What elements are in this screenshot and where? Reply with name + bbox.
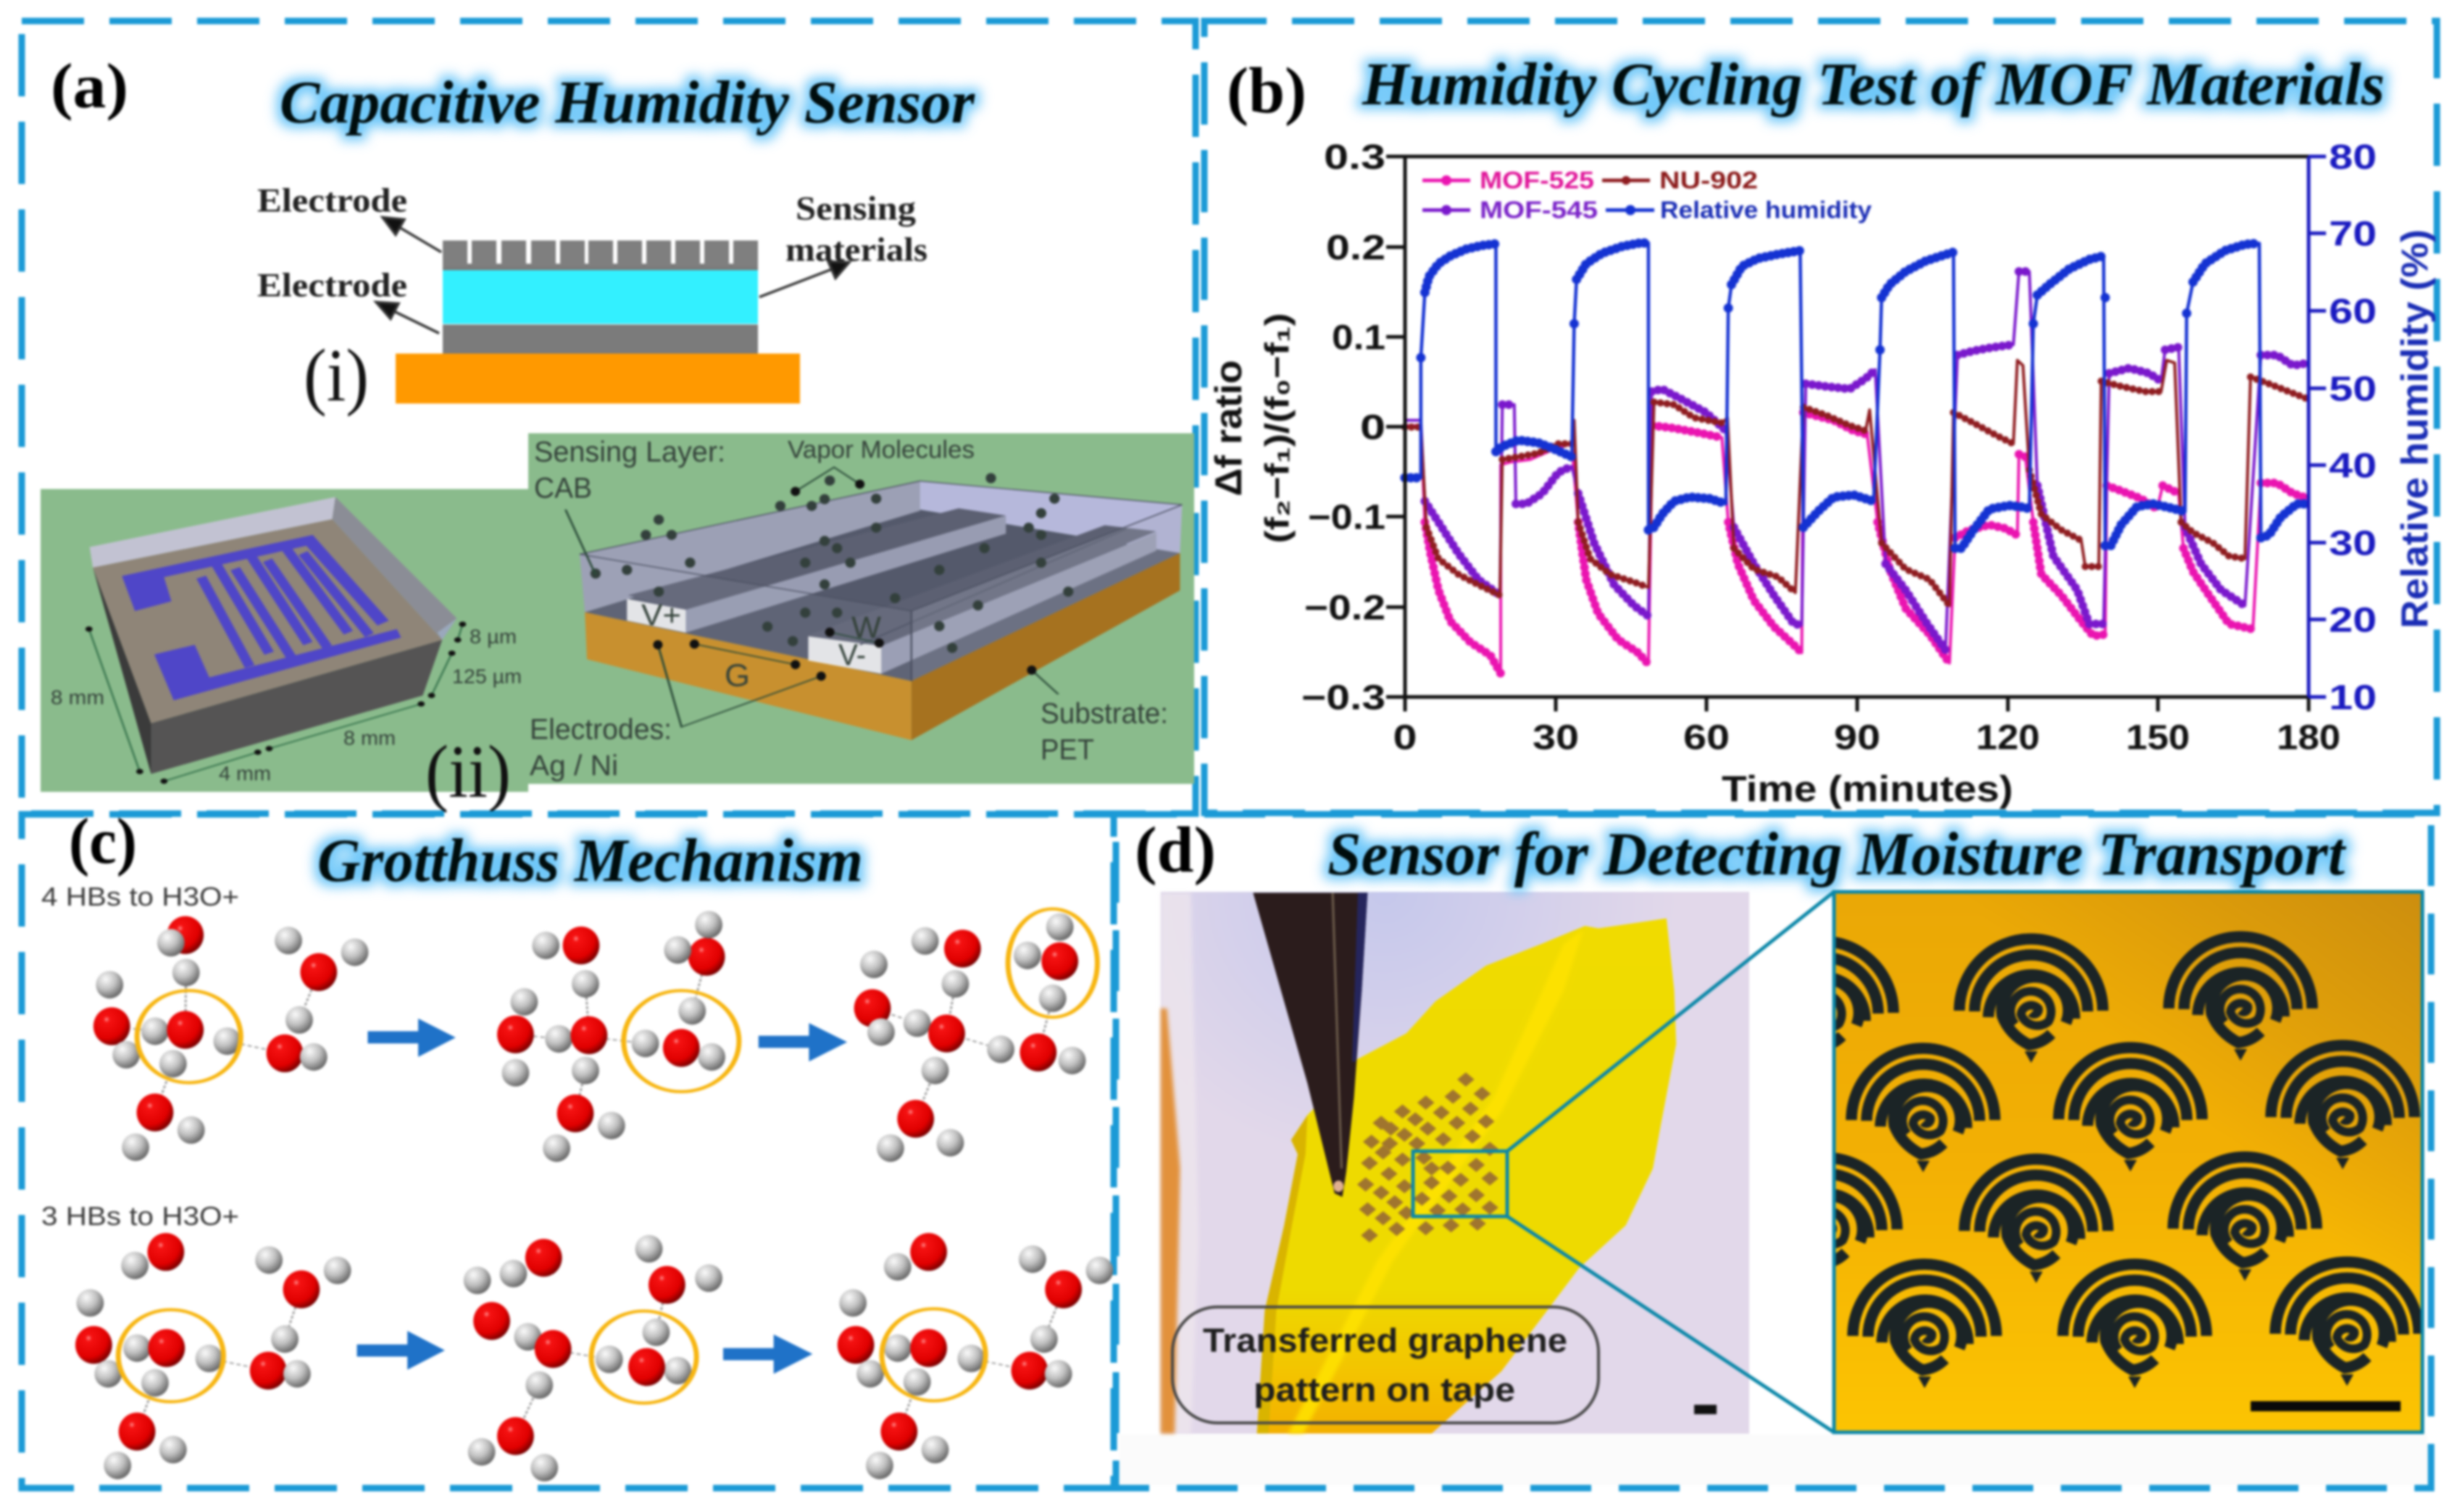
left axis title: (f₂−f₁)/(f₀−f₁) xyxy=(1258,313,1296,543)
diagram ii: sensing layer cross view xyxy=(530,436,1182,782)
legend: NU-902 xyxy=(1659,167,1758,193)
left axis tick labels: −0.2 xyxy=(1304,589,1385,627)
right axis title: Relative humidity (%) xyxy=(2394,229,2436,629)
row 1 cluster 2 xyxy=(497,911,739,1162)
x axis tick labels: 120 xyxy=(1976,719,2040,757)
diagram ii: interdigitated electrode chip xyxy=(51,497,522,785)
panel b: humidity cycling test xyxy=(1204,21,2437,813)
right axis tick labels: 70 xyxy=(2329,215,2377,254)
right axis tick labels: 50 xyxy=(2329,370,2377,409)
left axis tick labels xyxy=(1301,138,1385,717)
diagram ii: interdigitated electrode chip: 8 mm xyxy=(343,727,396,749)
row 1 cluster 3 xyxy=(854,909,1097,1162)
inset: spiral graphene sensors xyxy=(1830,888,2426,1436)
diagram i: layered sensor stack: materials xyxy=(785,231,928,269)
left axis title xyxy=(1208,313,1296,543)
diagram ii: sensing layer cross view: V- xyxy=(838,638,866,672)
scale bar: photo xyxy=(1694,1405,1717,1414)
row 2 cluster 2 xyxy=(464,1235,722,1482)
row 1 cluster 1 xyxy=(93,916,368,1161)
photo: graphene pattern on tape xyxy=(1161,892,1749,1434)
diagram ii: sensing layer cross view: PET xyxy=(1041,734,1094,766)
panel label a: (a) xyxy=(51,51,128,122)
molecule clusters xyxy=(75,909,1113,1482)
label: 3 HBs: 3 HBs to H3O+ xyxy=(41,1201,239,1231)
diagram i: layered sensor stack xyxy=(257,182,928,417)
series: MOF-545 xyxy=(1405,272,2309,650)
title: capacitive humidity sensor: Capacitive Humidity Sensor xyxy=(280,69,975,136)
left axis title: Δf ratio xyxy=(1208,360,1250,496)
right axis tick labels xyxy=(2329,138,2377,717)
scale bar: inset xyxy=(2251,1401,2401,1411)
left axis tick labels: 0 xyxy=(1360,409,1385,447)
callout: transferred graphene pattern xyxy=(1172,1307,1599,1423)
right axis tick labels: 20 xyxy=(2329,601,2377,640)
diagram ii: sensing layer cross view: Electrodes: xyxy=(530,714,672,745)
diagram ii: sensing layer cross view: G xyxy=(725,658,750,693)
diagram ii: interdigitated electrode chip: 8 mm xyxy=(51,686,104,709)
left axis tick labels: 0.3 xyxy=(1324,138,1385,177)
row 2 cluster 3 xyxy=(838,1233,1113,1479)
diagram i: layered sensor stack: (i) xyxy=(304,334,369,417)
row 2 cluster 1 xyxy=(75,1233,351,1479)
sub-panel label ii: (ii) xyxy=(425,730,511,814)
left axis tick labels: −0.1 xyxy=(1308,498,1385,537)
x axis tick labels: 0 xyxy=(1393,719,1417,757)
title: sensor for detecting moisture transport: Sensor for Detecting Moisture Transport xyxy=(1327,820,2346,888)
panel a: capacitive humidity sensor xyxy=(22,21,1196,814)
x axis title: Time (minutes) xyxy=(1722,769,2013,809)
title: humidity cycling test: Humidity Cycling Test of MOF Materials xyxy=(1362,51,2385,118)
diagram ii: interdigitated electrode chip: 125 µm xyxy=(452,665,522,688)
diagram ii: interdigitated electrode chip: 4 mm xyxy=(219,762,271,785)
x axis tick labels xyxy=(1393,719,2341,757)
x axis tick labels: 150 xyxy=(2126,719,2190,757)
right axis tick labels: 30 xyxy=(2329,525,2377,563)
callout: transferred graphene pattern: pattern on tape xyxy=(1254,1371,1515,1408)
right axis tick labels: 80 xyxy=(2329,138,2377,177)
panel label b: (b) xyxy=(1227,55,1306,127)
chart: frequency ratio and relative humidity over time xyxy=(1208,138,2436,809)
series: relative humidity xyxy=(1405,243,2309,548)
chart axes xyxy=(1386,156,2326,711)
x axis tick labels: 30 xyxy=(1533,719,1579,757)
legend: Relative humidity xyxy=(1660,196,1872,223)
x axis tick labels: 60 xyxy=(1683,719,1730,757)
legend: MOF-545 xyxy=(1480,196,1598,223)
diagram i: layered sensor stack: Sensing xyxy=(796,190,917,227)
callout: transferred graphene pattern: Transferred graphene xyxy=(1203,1321,1567,1359)
diagram ii: sensing layer cross view: Sensing Layer: xyxy=(534,436,725,468)
title: Grotthuss mechanism: Grotthuss Mechanism xyxy=(317,827,863,895)
left axis tick labels: 0.2 xyxy=(1326,229,1385,267)
diagram ii: green backgrounds xyxy=(41,433,1194,792)
diagram ii: interdigitated electrode chip: 8 µm xyxy=(470,625,517,648)
right axis tick labels: 40 xyxy=(2329,447,2377,485)
label: 4 HBs: 4 HBs to H3O+ xyxy=(41,882,239,911)
panel label d: (d) xyxy=(1135,814,1216,886)
diagram i: layered sensor stack: Electrode xyxy=(257,182,407,220)
panel c: Grotthuss mechanism xyxy=(22,806,1114,1488)
legend xyxy=(1422,167,1872,223)
arrows between clusters xyxy=(357,1019,847,1374)
x axis tick labels: 180 xyxy=(2277,719,2341,757)
x axis tick labels: 90 xyxy=(1834,719,1880,757)
right axis tick labels: 10 xyxy=(2329,679,2377,717)
left axis tick labels: −0.3 xyxy=(1301,679,1385,717)
diagram ii: sensing layer cross view: Vapor Molecules xyxy=(788,436,975,464)
right axis tick labels: 60 xyxy=(2329,293,2377,331)
diagram ii: sensing layer cross view: Substrate: xyxy=(1041,698,1168,730)
diagram ii: sensing layer cross view: Ag / Ni xyxy=(530,750,618,782)
panel label c: (c) xyxy=(69,806,137,877)
diagram ii: sensing layer cross view: V+ xyxy=(641,598,681,632)
series: MOF-525 xyxy=(1405,412,2309,674)
zoom indicator lines and box xyxy=(1413,892,1834,1432)
left axis tick labels: 0.1 xyxy=(1332,319,1385,357)
diagram ii: sensing layer cross view: W xyxy=(851,610,881,644)
series: NU-902 xyxy=(1405,360,2309,606)
panel d: moisture transport sensor xyxy=(1116,814,2431,1488)
legend: MOF-525 xyxy=(1480,167,1594,193)
diagram i: layered sensor stack: Electrode xyxy=(257,267,407,304)
diagram ii: sensing layer cross view: CAB xyxy=(534,472,592,504)
